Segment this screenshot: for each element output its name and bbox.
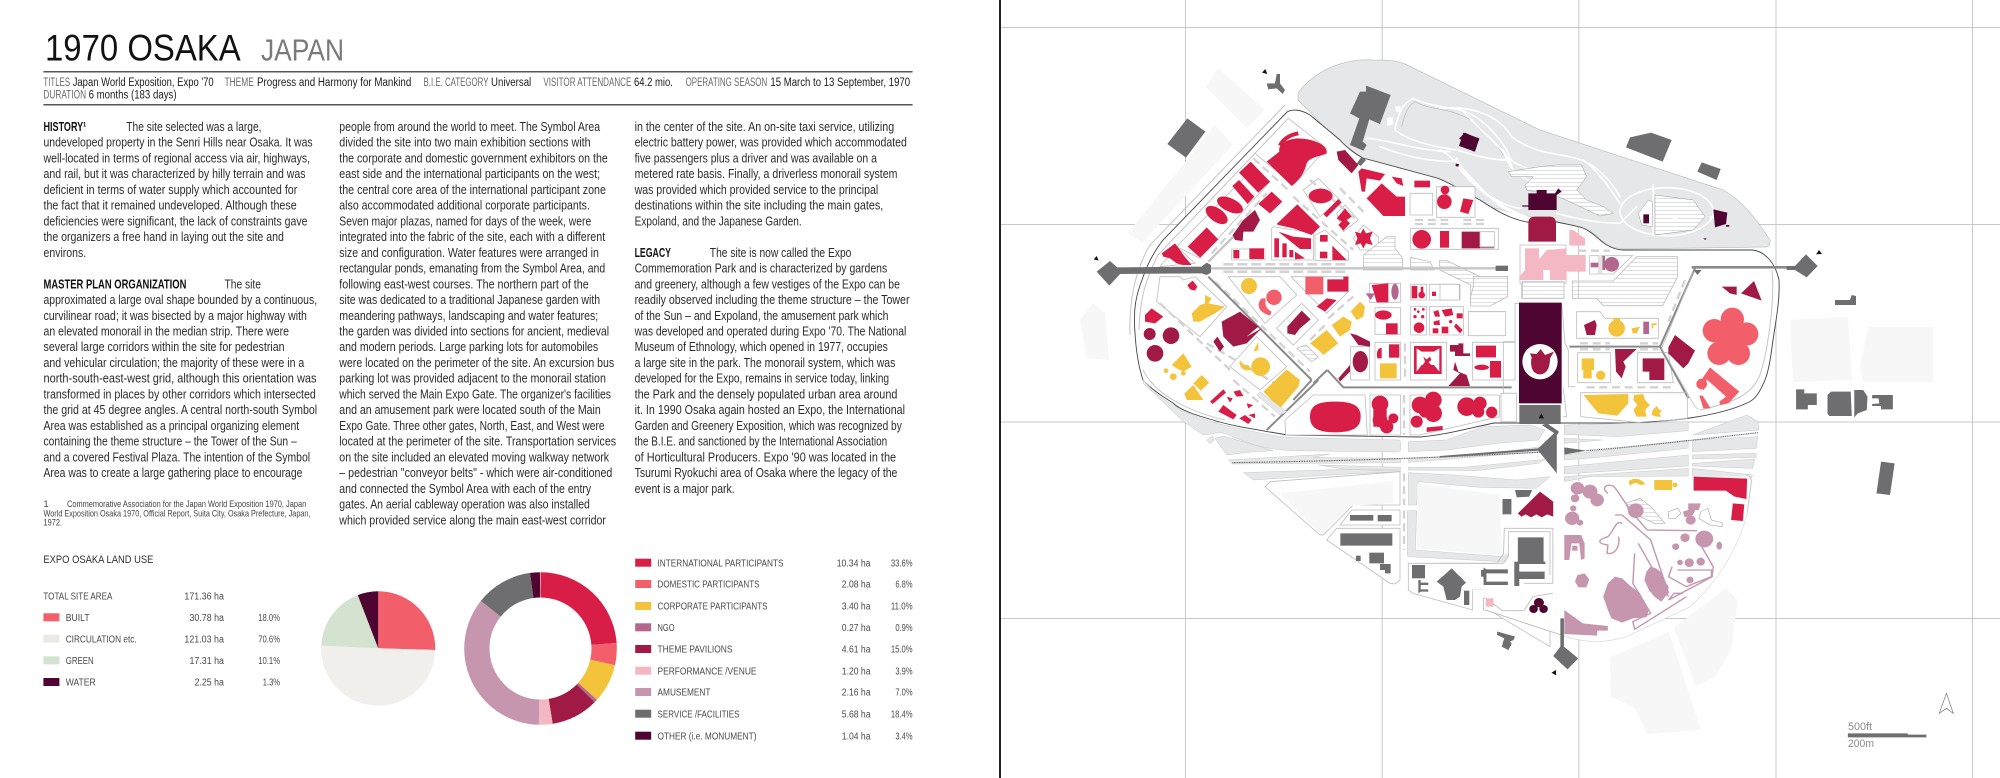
text column 3: transport and legacy: it. In 1990 Osaka again hosted an Expo, the International	[635, 402, 905, 417]
north garden park	[1298, 60, 1770, 249]
text column 1: history and master plan: approximated a large oval shape bounded by a continuous,	[44, 292, 317, 307]
exposition facts: 64.2 mio.	[634, 77, 673, 89]
map quadrant: southeast	[1440, 389, 1953, 737]
donut legend: 7.0%	[895, 688, 913, 699]
text column 1: history and master plan: an elevated monorail in the median strip. There were	[44, 324, 289, 338]
south international pavilions	[1694, 477, 1747, 521]
main gate monorail station	[1440, 423, 1586, 473]
exposition facts: Universal	[491, 77, 531, 89]
south amusement water	[1626, 498, 1722, 527]
text column 3: transport and legacy: Museum of Ethnology, which opened in 1977, occupies	[635, 339, 888, 354]
east entry marker	[1816, 250, 1822, 254]
text column 1: history and master plan: environs.	[44, 245, 86, 260]
exposition facts: Japan World Exposition, Expo '70	[73, 77, 214, 89]
flower pavilion	[1696, 308, 1758, 408]
text column 3: transport and legacy: was developed and operated during Expo '70. The National	[634, 324, 906, 338]
text column 2: divided the site into two main exhibition sections with	[339, 135, 591, 150]
map quadrant: southwest	[1143, 380, 1550, 650]
footnote: Commemorative Association for the Japan World Exposition 1970, Japan	[67, 499, 306, 509]
pedestrian dash rows	[1160, 158, 1488, 390]
south zone fill	[1472, 477, 1747, 641]
land use table: 30.78 ha	[190, 613, 224, 624]
tower of the sun plaza	[1522, 344, 1558, 379]
exposition facts: THEME	[224, 77, 254, 89]
donut legend: 3.40 ha	[842, 602, 871, 613]
land use heading: EXPO OSAKA LAND USE	[43, 554, 153, 566]
text column 1: history and master plan: HISTORY¹	[44, 119, 86, 134]
land use table: 10.1%	[258, 656, 280, 667]
land use table: 18.0%	[258, 613, 280, 624]
exposition facts: DURATION	[43, 89, 86, 101]
text column 2: on the site included an elevated moving walkway network	[339, 449, 610, 464]
text column 1: history and master plan: deficient in terms of water supply which accounted for	[44, 182, 298, 197]
north entry marker	[1262, 69, 1267, 74]
east corridors and gate	[1569, 254, 1818, 398]
donut legend: 33.6%	[891, 558, 913, 569]
text column 2: parking lot was provided adjacent to the monorail station	[339, 371, 606, 386]
text column 3: transport and legacy: Garden and Greenery Exposition, which was recognized by	[635, 418, 902, 433]
theme band details	[1480, 232, 1494, 247]
theme pavilions east	[1584, 320, 1695, 380]
dash rows east	[1578, 251, 1685, 387]
donut legend: DOMESTIC PARTICIPANTS	[658, 580, 760, 591]
text column 1: history and master plan: deficiencies were significant, the lack of constraints gave	[44, 213, 308, 228]
donut legend: AMUSEMENT	[658, 688, 710, 699]
title: JAPAN	[261, 33, 344, 68]
donut legend: OTHER (i.e. MONUMENT)	[658, 731, 756, 742]
block outlines	[1440, 227, 1678, 383]
international pavilions south	[1210, 389, 1497, 433]
text column 2: the garden was divided into sections for ancient, medieval	[339, 324, 609, 338]
site plan map	[1001, 0, 2000, 778]
theme and NGO pavilions	[1528, 217, 1762, 301]
garden ponds	[1508, 165, 1705, 235]
corporate and domestic pavilions	[1164, 277, 1397, 408]
amusement park buildings	[1564, 482, 1722, 636]
text column 2: were located on the perimeter of the site. An excursion bus	[338, 355, 615, 370]
text column 2: Seven major plazas, named for days of the week, were	[339, 213, 591, 228]
service buildings	[1340, 515, 1515, 650]
scale labels	[1848, 721, 1874, 750]
text column 1: history and master plan: Area was to create a large gathering place to encourage	[44, 465, 302, 480]
text column 2: integrated into the fabric of the site, each with a different	[339, 229, 606, 244]
service buildings	[1626, 133, 1856, 305]
text column 2: people from around the world to meet. The Symbol Area	[339, 119, 601, 134]
text column 1: history and master plan: undeveloped property in the Senri Hills near Osaka. It was	[44, 135, 313, 150]
text column 2: Expo Gate. Three other gates, North, East, and West were	[339, 418, 605, 433]
south entry marker	[1551, 670, 1556, 675]
text column 3: transport and legacy: Tsurumi Ryokuchi area of Osaka where the legacy of the	[635, 465, 897, 480]
text column 1: history and master plan: north-south-east-west grid, although this orientation was	[44, 371, 317, 386]
text column 2: located at the perimeter of the site. Transportation services	[339, 434, 617, 449]
scale labels: 200m	[1848, 738, 1874, 750]
exposition facts: VISITOR ATTENDANCE	[543, 77, 632, 89]
map quadrant: east central	[1581, 272, 1758, 423]
tower of the sun	[1530, 349, 1554, 374]
land use table	[43, 591, 280, 689]
text column 3: transport and legacy: metered rate basis. Finally, a driverless monorail system	[635, 166, 897, 181]
text column 3: transport and legacy: LEGACY	[635, 245, 671, 260]
donut legend: 1.04 ha	[842, 731, 871, 742]
donut legend: 4.61 ha	[842, 645, 871, 656]
text column 3: transport and legacy: in the center of the site. An on-site taxi service, utilizing	[635, 119, 894, 134]
text column 1: history and master plan: the grid at 45 degree angles. A central north-south Symbol	[44, 402, 317, 417]
text column 3: transport and legacy: Expoland, and the Japanese Garden.	[635, 213, 802, 228]
donut legend: 3.9%	[895, 666, 913, 677]
performance venue	[1519, 230, 1586, 280]
monorail line	[1232, 452, 1550, 463]
text column 1: history and master plan: containing the theme structure – the Tower of the Sun –	[44, 434, 297, 449]
text column 2: and an amusement park were located south of the Main	[339, 402, 601, 417]
donut legend	[635, 558, 913, 742]
NGO bar	[1643, 322, 1649, 334]
text column 2: and connected the Symbol Area with each of the entry	[339, 481, 592, 496]
donut legend: NGO	[658, 623, 675, 634]
main east-west corridor	[1211, 266, 1508, 271]
exposition facts: TITLES	[43, 77, 70, 89]
land use table: TOTAL SITE AREA	[43, 591, 113, 602]
donut legend: 0.9%	[895, 623, 913, 634]
map quadrant: northwest	[1094, 69, 1540, 408]
text column 2: – pedestrian "conveyor belts" - which were air-conditioned	[339, 465, 612, 480]
text column 2: following east-west courses. The northern part of the	[339, 276, 589, 291]
monument trefoil	[1529, 598, 1548, 613]
text column 1: history and master plan: and rail, but it was characterized by hilly terrain and was	[44, 166, 306, 181]
text column 2: rectangular ponds, emanating from the Symbol Area, and	[339, 261, 605, 276]
south corporate pavilions	[1629, 479, 1677, 490]
text column 1: history and master plan: Area was established as a principal organizing element	[44, 418, 300, 433]
garden paths east	[1440, 108, 1717, 236]
text column 3: transport and legacy	[634, 119, 910, 496]
text column 1: history and master plan: the organizers a free hand in laying out the site and	[44, 229, 284, 244]
text column 2: the central core area of the international participant zone	[339, 182, 606, 197]
donut legend: 10.34 ha	[837, 558, 871, 569]
festival plaza	[1519, 303, 1562, 403]
text column 3: transport and legacy: the B.I.E. and sanctioned by the International Association	[635, 434, 887, 449]
text column 2: east side and the international participants on the west;	[339, 166, 600, 181]
performance venue	[1486, 598, 1494, 607]
donut legend: 0.27 ha	[842, 623, 871, 634]
corporate pavilions east	[1582, 318, 1662, 417]
land use table: 171.36 ha	[184, 591, 224, 602]
donut legend: PERFORMANCE /VENUE	[658, 666, 757, 677]
text column 2: and modern periods. Large parking lots for automobiles	[339, 339, 599, 354]
theme pavilions	[1144, 150, 1480, 386]
dark garden monuments	[1456, 133, 1479, 167]
text column 3: transport and legacy: readily observed including the theme structure – the Tower	[635, 292, 910, 307]
land use table: 70.6%	[258, 634, 280, 645]
exposition facts	[43, 77, 910, 101]
text column 1: history and master plan: transformed in places by other corridors which intersected	[44, 386, 316, 401]
west blocks	[1265, 393, 1550, 647]
corridors and west gate	[1097, 235, 1512, 400]
exposition facts: Progress and Harmony for Mankind	[257, 77, 411, 89]
service buildings	[1167, 74, 1391, 166]
text column 2: site was dedicated to a traditional Japanese garden with	[339, 292, 600, 307]
garden paths west	[1367, 98, 1540, 217]
south amusement outline	[1483, 475, 1751, 641]
text column 1: history and master plan: The site selected was a large,	[126, 119, 262, 134]
text column 1: history and master plan: and vehicular circulation; the majority of these were in a	[44, 355, 305, 370]
donut legend: 1.20 ha	[842, 666, 871, 677]
text column 1: history and master plan: and a covered Festival Plaza. The intention of the Symbol	[44, 449, 310, 464]
pie chart: land use	[321, 591, 435, 706]
text column 1: history and master plan	[43, 119, 317, 480]
footnote: 1972.	[44, 518, 62, 528]
text column 1: history and master plan: the fact that it remained undeveloped. Although these	[44, 198, 297, 213]
text column 1: history and master plan: curvilinear road; it was bisected by a major highway with	[44, 308, 307, 323]
text column 1: history and master plan: The site	[224, 276, 261, 291]
text column 3: transport and legacy: a large site in the park. The monorail system, which was	[635, 355, 896, 370]
text column 3: transport and legacy: was provided which provided service to the principal	[634, 182, 878, 197]
donut legend: 2.16 ha	[842, 688, 871, 699]
yellow block outline	[1581, 393, 1687, 423]
north arrow	[1939, 693, 1953, 713]
text column 2: the corporate and domestic government exhibitors on the	[339, 150, 608, 166]
parking lots	[1080, 68, 1933, 734]
parking lot overlays	[1280, 481, 1502, 555]
donut legend: 3.4%	[895, 731, 913, 742]
footnote: World Exposition Osaka 1970, Official Report, Suita City, Osaka Prefecture, Japan,	[44, 508, 310, 518]
donut legend: 6.8%	[895, 580, 913, 591]
donut legend: SERVICE /FACILITIES	[658, 709, 740, 720]
text column 3: transport and legacy: Commemoration Park and is characterized by gardens	[635, 261, 888, 276]
text column 3: transport and legacy: of Horticultural Producers. Expo '90 was located in the	[635, 449, 896, 464]
text column 3: transport and legacy: event is a major park.	[635, 481, 735, 496]
central dashes	[1400, 395, 1407, 550]
international participants pavilions	[1145, 133, 1504, 378]
text column 1: history and master plan: MASTER PLAN ORGANIZATION	[44, 276, 186, 291]
text column 3: transport and legacy: electric battery power, was provided which accommodated	[635, 135, 907, 150]
land use table: CIRCULATION etc.	[66, 634, 137, 645]
footnote: 1	[44, 499, 49, 509]
land use table: 17.31 ha	[190, 656, 224, 667]
site boundary	[1134, 110, 1779, 437]
land use table: GREEN	[66, 656, 94, 667]
text column 2: meandering pathways, landscaping and water features;	[339, 308, 598, 323]
east district outline	[1662, 272, 1698, 409]
text column 3: transport and legacy: of the Sun – and Expoland, the amusement park which	[635, 308, 888, 323]
text column 1: history and master plan: several large corridors within the site for pedestrian	[44, 339, 285, 354]
text column 3: transport and legacy: and greenery, although a few vestiges of the Expo can be	[635, 276, 900, 291]
theme pavilion and services	[1481, 490, 1553, 650]
land use table: 121.03 ha	[184, 634, 224, 645]
exposition facts: B.I.E. CATEGORY	[424, 77, 489, 89]
donut legend: INTERNATIONAL PARTICIPANTS	[658, 558, 784, 569]
donut legend: CORPORATE PARTICIPANTS	[658, 602, 768, 613]
text column 2: which served the Main Expo Gate. The organizer's facilities	[339, 386, 611, 401]
main gate forecourt	[1519, 405, 1561, 424]
text column 3: transport and legacy: The site is now called the Expo	[710, 245, 851, 260]
footnote	[44, 499, 310, 528]
text column 3: transport and legacy: five passengers plus a driver and was available on a	[635, 150, 878, 166]
text column 3: transport and legacy: destinations within the site including the main gates,	[635, 198, 883, 213]
donut legend: 2.08 ha	[842, 580, 871, 591]
monorail line east	[1586, 433, 1758, 451]
land use table: 1.3%	[263, 678, 280, 689]
donut legend: 15.0%	[891, 645, 913, 656]
map quadrant: festival and symbol axis	[1503, 303, 1575, 424]
map grid	[1001, 0, 2000, 778]
text column 2: also accommodated additional corporate participants.	[339, 198, 590, 213]
donut legend: 11.0%	[891, 602, 913, 613]
map quadrant: northeast	[1440, 108, 1856, 398]
block outlines	[1157, 118, 1515, 390]
east off-site facilities	[1796, 389, 1895, 495]
scale bar	[1848, 733, 1926, 737]
land use table: WATER	[66, 678, 96, 689]
text column 3: transport and legacy: developed for the Expo, remains in service today, linking	[635, 371, 889, 386]
NGO pavilions	[1366, 247, 1494, 300]
symbol area outlines	[1503, 303, 1575, 417]
donut legend: 5.68 ha	[842, 709, 871, 720]
text column 2	[338, 119, 617, 527]
dark monuments	[1456, 133, 1729, 293]
donut legend: THEME PAVILIONS	[658, 645, 733, 656]
text column 1: history and master plan: well-located in terms of regional access via air, highways,	[43, 150, 310, 166]
scale labels: 500ft	[1848, 721, 1872, 733]
donut chart: built land use	[477, 585, 604, 712]
title: 1970 OSAKA	[45, 28, 241, 69]
text column 2: which provided service along the main east-west corridor	[338, 512, 606, 527]
text column 2: size and configuration. Water features were arranged in	[339, 245, 599, 260]
text column 2: gates. An aerial cableway operation was also installed	[339, 496, 590, 512]
land use table: BUILT	[66, 613, 90, 624]
exposition facts: OPERATING SEASON	[686, 77, 767, 89]
main gate marker	[1539, 413, 1544, 418]
highway verges east	[1564, 415, 1759, 482]
south block outlines	[1440, 528, 1561, 635]
text column 3: transport and legacy: the Park and the densely populated urban area around	[635, 386, 897, 401]
exposition facts: 15 March to 13 September, 1970	[770, 77, 910, 89]
highway verges	[1143, 380, 1550, 562]
exposition facts: 6 months (183 days)	[89, 89, 177, 101]
land use table: 2.25 ha	[195, 678, 224, 689]
south gate	[1553, 618, 1578, 669]
amusement ride tracks	[1600, 485, 1713, 629]
donut legend: 18.4%	[891, 709, 913, 720]
west entry marker	[1094, 256, 1099, 261]
diagonal corridor	[1233, 380, 1318, 430]
